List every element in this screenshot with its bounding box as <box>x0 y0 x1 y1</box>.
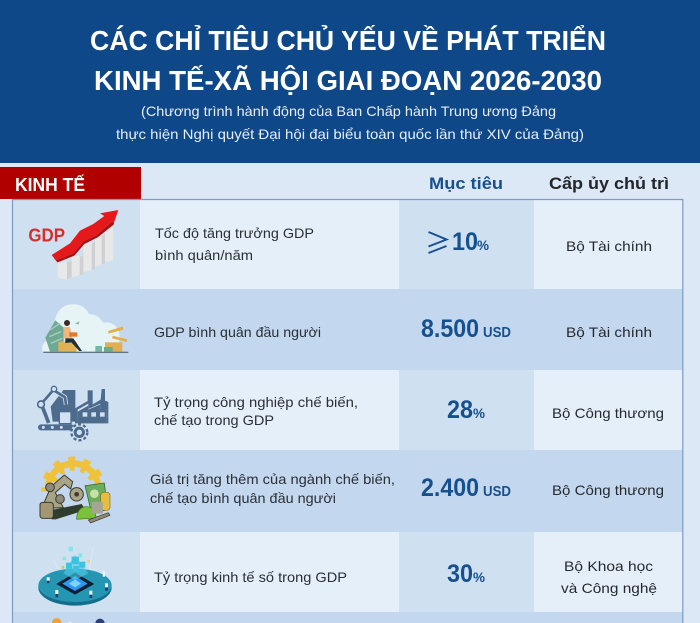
row 4 target: 2.400 <box>421 474 479 502</box>
row 1 target <box>428 228 490 256</box>
row 4 target <box>421 474 511 502</box>
subtitle: (Chương trình hành động của Ban Chấp hành Trung ương Đảng <box>141 103 556 119</box>
row 4 label <box>150 471 395 506</box>
title line 1: CÁC CHỈ TIÊU CHỦ YẾU VỀ PHÁT TRIỂN <box>90 24 606 56</box>
column heading: target: Mục tiêu <box>429 174 503 193</box>
row 2 label: GDP bình quân đầu người <box>154 324 321 340</box>
row 1 body: Bộ Tài chính <box>566 238 652 254</box>
column heading: responsible body: Cấp ủy chủ trì <box>549 174 669 193</box>
icon: GDP rising arrow: GDP <box>28 225 65 246</box>
icon: person with money <box>42 304 128 353</box>
row 4 label: chế tạo bình quân đầu người <box>150 490 336 506</box>
subtitle <box>116 103 584 142</box>
row 1 target: 10 <box>452 228 478 256</box>
icon: gear and robotic arm <box>40 464 110 523</box>
section heading: KINH TẾ <box>15 174 85 195</box>
subtitle: thực hiện Nghị quyết Đại hội đại biểu toàn quốc lần thứ XIV của Đảng) <box>116 126 584 142</box>
row 4 label: Giá trị tăng thêm của ngành chế biến, <box>150 471 395 487</box>
icon: GDP rising arrow <box>28 210 118 280</box>
row 4 target: USD <box>483 484 511 500</box>
row 5 body: và Công nghệ <box>561 580 657 596</box>
row 1 target: % <box>477 237 490 253</box>
icon: digital economy chip <box>38 547 112 623</box>
row 3 label: chế tạo trong GDP <box>154 412 274 428</box>
table background <box>12 199 683 623</box>
icon: factory and robot arm <box>38 386 108 441</box>
row 4 body: Bộ Công thương <box>552 482 664 498</box>
row 2 target: USD <box>483 325 511 341</box>
row 5 body <box>561 558 657 596</box>
header banner <box>0 0 700 163</box>
row 1 label <box>155 225 314 263</box>
row 5 target: % <box>473 569 486 585</box>
row 2 body: Bộ Tài chính <box>566 324 652 340</box>
row 5 label: Tỷ trọng kinh tế số trong GDP <box>154 569 347 585</box>
row 3 body: Bộ Công thương <box>552 405 664 421</box>
row 1 label: Tốc độ tăng trưởng GDP <box>155 225 314 241</box>
row 5 target: 30 <box>447 560 473 588</box>
row 3 target: % <box>473 405 486 421</box>
row 3 label: Tỷ trọng công nghiệp chế biến, <box>154 394 358 410</box>
section tab: Kinh tế <box>0 167 141 199</box>
row 2 target: 8.500 <box>421 315 479 343</box>
row 5 body: Bộ Khoa học <box>564 558 653 574</box>
row 1 label: bình quân/năm <box>155 247 253 263</box>
row 3 label <box>154 394 358 428</box>
title line 2: KINH TẾ-XÃ HỘI GIAI ĐOẠN 2026-2030 <box>94 64 602 96</box>
row 3 target: 28 <box>447 396 473 424</box>
row 2 target <box>421 315 511 343</box>
